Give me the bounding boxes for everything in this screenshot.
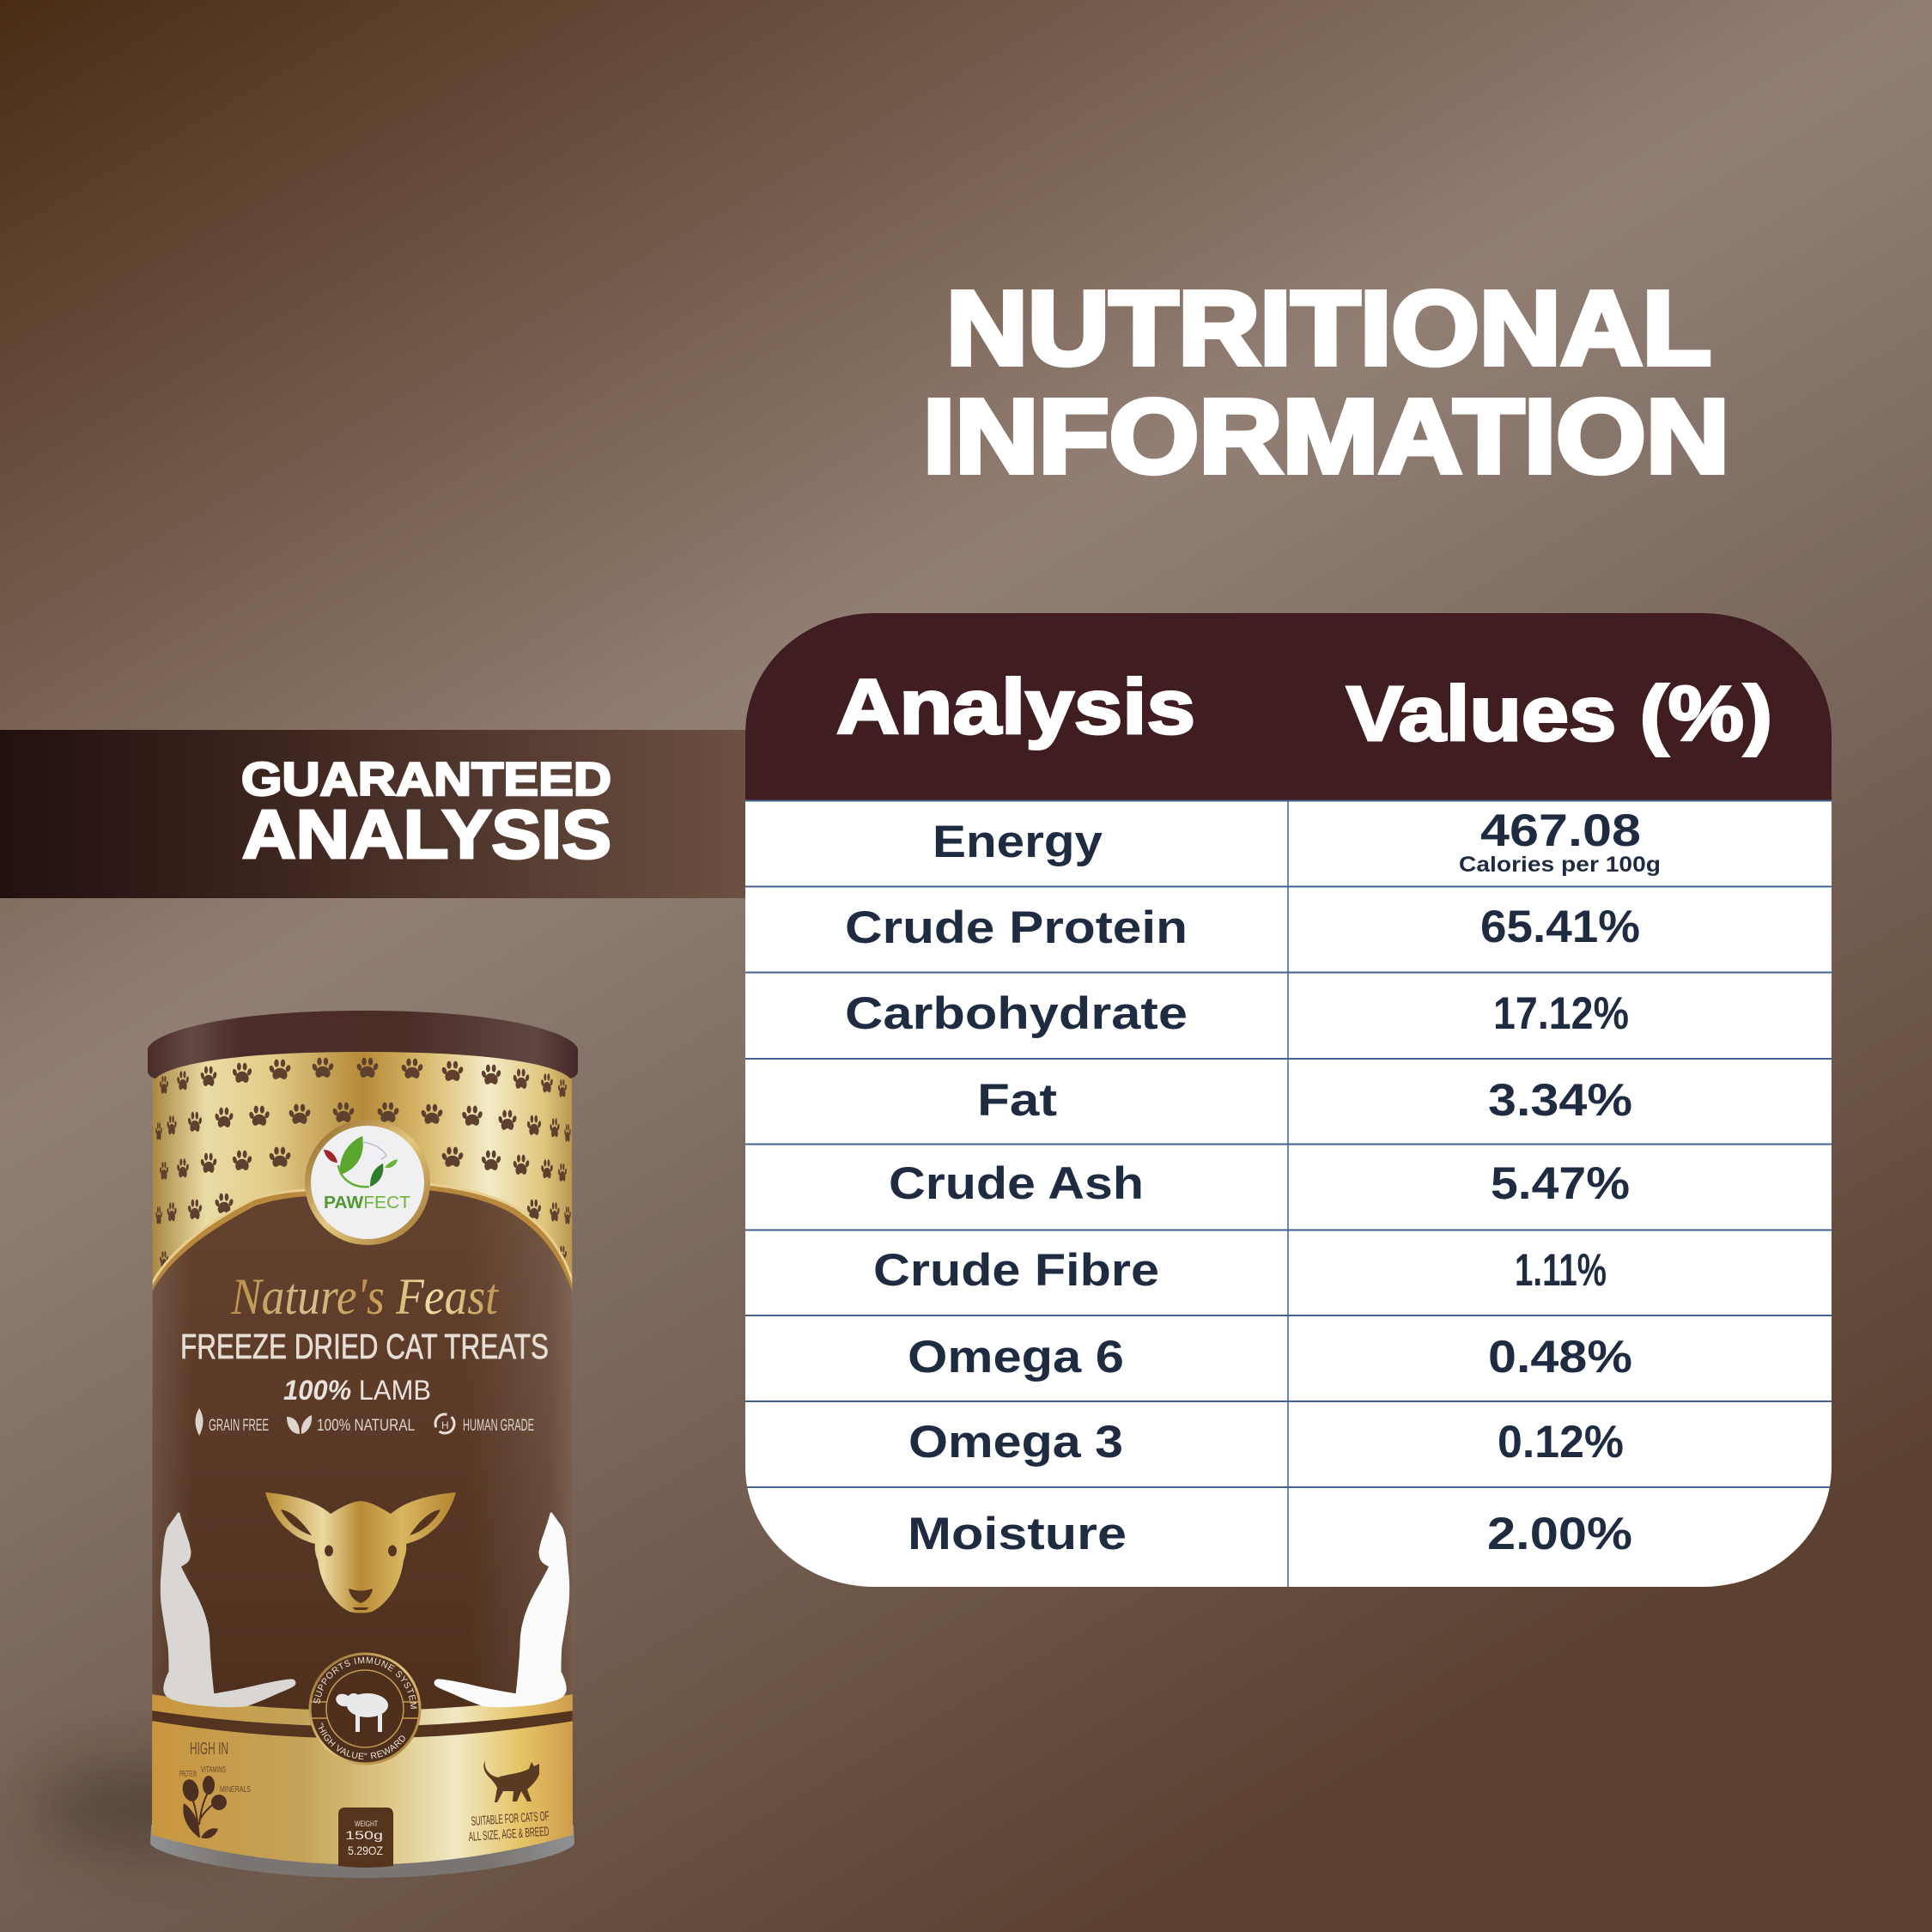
- icon: human grade: H: [441, 1419, 449, 1431]
- can base rim: [150, 1825, 574, 1878]
- high in callout: VITAMINS: [201, 1765, 226, 1775]
- illustration: left cat: [161, 1514, 295, 1706]
- high in callout: HIGH IN: [190, 1740, 228, 1759]
- paw pattern: [155, 1058, 571, 1269]
- row: crude ash: Crude Ash: [889, 1158, 1144, 1209]
- product can: [148, 1011, 578, 1878]
- row: omega 3: 0.12%: [1498, 1417, 1624, 1467]
- icon: human grade: [435, 1414, 454, 1433]
- row: moisture: 2.00%: [1487, 1509, 1632, 1559]
- lower gold band: [152, 1694, 573, 1864]
- illustration: gold lamb head: [265, 1492, 456, 1613]
- label text: 100% lamb: 100% LAMB: [283, 1375, 431, 1406]
- label text: freeze dried cat treats: FREEZE DRIED CAT TREATS: [180, 1327, 549, 1366]
- table header: [836, 665, 1772, 757]
- row: crude fibre: 1.11%: [1515, 1245, 1607, 1296]
- row: omega 3: [908, 1417, 1624, 1467]
- label text: product name: Nature's Feast: [230, 1268, 499, 1325]
- row: energy: 467.08: [1480, 805, 1641, 856]
- row: energy: Energy: [933, 817, 1103, 867]
- nutrition table: [745, 613, 1832, 1587]
- row: crude fibre: [873, 1245, 1607, 1296]
- row: omega 3: Omega 3: [908, 1417, 1123, 1467]
- icon: grain: [196, 1408, 203, 1436]
- icon: leaves: [287, 1415, 312, 1434]
- title: nutritional information: INFORMATION: [923, 378, 1729, 495]
- illustration: right cat: [435, 1514, 568, 1706]
- row: crude protein: 65.41%: [1480, 902, 1640, 952]
- medal badge: SUPPORTS IMMUNE SYSTEM: [313, 1657, 417, 1709]
- medal badge: "HIGH VALUE" REWARD: [318, 1722, 405, 1759]
- logo wordmark: PAWFECT: [324, 1194, 410, 1212]
- row: fat: [977, 1075, 1632, 1126]
- row: crude protein: [845, 902, 1640, 953]
- suitable for cats note: SUITABLE FOR CATS OF: [471, 1809, 550, 1829]
- banner: guaranteed analysis: [0, 730, 745, 898]
- weight tag: [338, 1807, 393, 1868]
- label claims row: HUMAN GRADE: [463, 1417, 534, 1435]
- icon: walking cat: [483, 1760, 539, 1802]
- row: moisture: Moisture: [908, 1509, 1127, 1559]
- high in callout: PROTEIN: [179, 1770, 197, 1779]
- row: carbohydrate: 17.12%: [1493, 988, 1629, 1039]
- high in callout: [179, 1740, 251, 1838]
- row: crude ash: 5.47%: [1491, 1158, 1630, 1209]
- row: carbohydrate: [845, 988, 1629, 1039]
- icon: sheep: [334, 1692, 388, 1732]
- high in callout: MINERALS: [220, 1785, 251, 1795]
- logo leaves: [340, 1136, 363, 1175]
- label claims row: 100% NATURAL: [317, 1417, 415, 1435]
- row: fat: 3.34%: [1488, 1075, 1632, 1126]
- row: fat: Fat: [977, 1075, 1057, 1126]
- row: omega 6: Omega 6: [908, 1332, 1124, 1382]
- product can shadow: [34, 1765, 249, 1850]
- table header: Analysis: [836, 665, 1195, 750]
- label claims row: [196, 1408, 534, 1436]
- row: crude fibre: Crude Fibre: [873, 1245, 1159, 1296]
- table body and grid: [745, 613, 1832, 1587]
- banner: guaranteed analysis: GUARANTEED: [241, 752, 611, 805]
- row: crude ash: [889, 1158, 1630, 1209]
- title: nutritional information: [923, 270, 1729, 495]
- row: energy: Calories per 100g: [1459, 853, 1661, 877]
- weight tag: 5.29OZ: [348, 1844, 383, 1857]
- row: omega 6: [908, 1332, 1632, 1382]
- label claims row: GRAIN FREE: [209, 1417, 269, 1435]
- weight tag: WEIGHT: [355, 1820, 378, 1828]
- icon: plant: [180, 1776, 227, 1838]
- row: crude protein: Crude Protein: [845, 902, 1188, 953]
- table header: Values (%): [1346, 671, 1772, 757]
- logo badge: [305, 1120, 430, 1245]
- row: energy: [933, 805, 1661, 877]
- row: carbohydrate: Carbohydrate: [845, 988, 1188, 1039]
- weight tag: 150g: [345, 1828, 383, 1842]
- banner: guaranteed analysis: ANALYSIS: [242, 796, 611, 872]
- can lid: [148, 1011, 578, 1078]
- brown arch panel: [146, 1183, 577, 1726]
- suitable for cats note: [468, 1760, 550, 1844]
- medal badge: [309, 1652, 421, 1765]
- suitable for cats note: ALL SIZE, AGE & BREED: [468, 1824, 550, 1844]
- can label: [152, 1052, 573, 1864]
- title: nutritional information: NUTRITIONAL: [946, 270, 1711, 386]
- row: omega 6: 0.48%: [1488, 1332, 1632, 1382]
- row: moisture: [908, 1509, 1632, 1559]
